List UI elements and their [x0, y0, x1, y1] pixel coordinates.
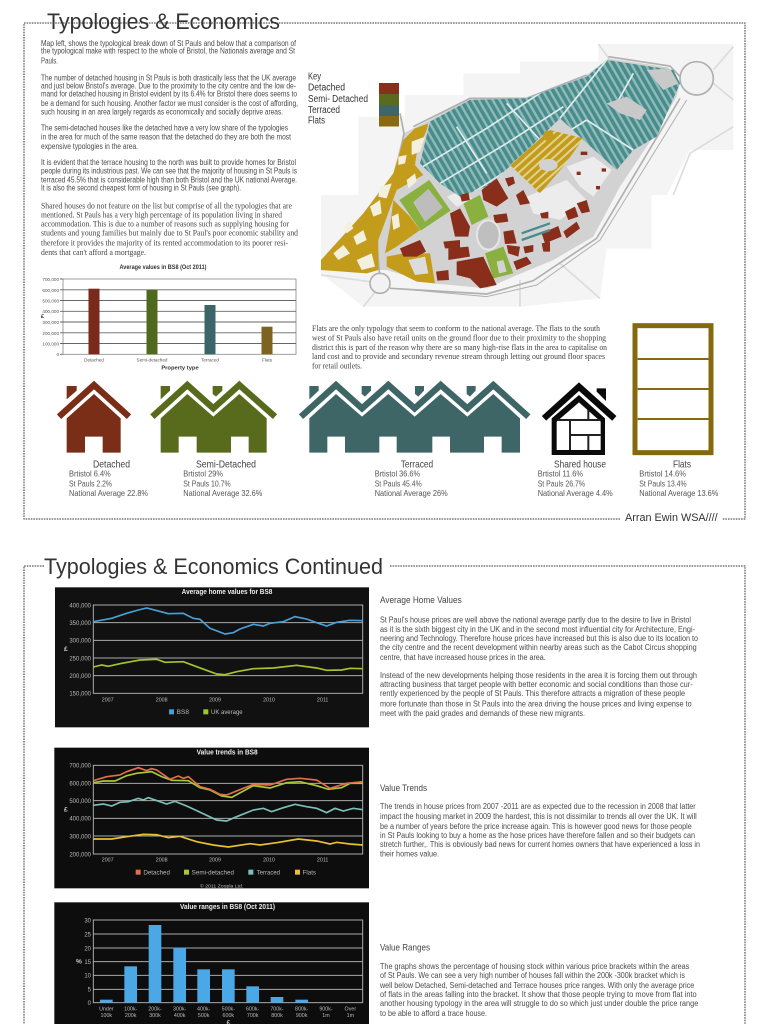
icon: semi-detached houses: [152, 385, 275, 453]
stats: shared house: Shared house: [554, 458, 606, 470]
bar chart: value ranges: 600k: [223, 1013, 234, 1019]
title: Typologies & Economics: [47, 9, 280, 34]
text block: value ranges: well below Detached, Semi-detached and Terrace houses price ranges. With only the average price: [379, 981, 694, 990]
bar chart: value ranges: 400k-: [197, 1007, 211, 1013]
line chart: average home values: 2011: [317, 698, 328, 704]
bar chart: average values: £: [41, 314, 44, 320]
line chart: value trends: 2010: [263, 857, 275, 863]
author credit: Arran Ewin WSA////: [625, 512, 719, 524]
stats: flats: St Pauls 13.4%: [639, 480, 687, 488]
bar chart: value ranges: 1m: [322, 1013, 330, 1019]
bar chart: value ranges: 300k: [149, 1013, 161, 1019]
bar chart: value ranges: 700k-: [270, 1007, 284, 1013]
bar chart: value ranges: Value ranges in BS8 (Oct 2011): [180, 902, 275, 911]
line chart: average home values: BS8: [177, 709, 189, 716]
map key: Terraced: [308, 105, 340, 116]
bar chart: average values: Average values in BS8 (Oct 2011): [120, 265, 206, 271]
text block: value trends: in St Pauls looking to buy a home as the hose prices have therefore fallen and so their budgets can: [380, 831, 695, 840]
bar chart: average values: 700,000: [42, 277, 59, 282]
map key: Key: [308, 72, 321, 82]
text block: value trends: impact the housing market in 2009 the hardest, this is not dissimilar to trends all over the UK. It will: [380, 812, 697, 821]
bar chart: value ranges: 30: [84, 918, 92, 924]
bar chart: value ranges: Over: [345, 1007, 356, 1013]
flats text block: Flats are the only typology that seem to conform to the national average. The flats to the south: [312, 323, 601, 333]
line chart: value trends: Semi-detached: [192, 869, 234, 876]
bar chart: value ranges: 10: [84, 974, 92, 980]
text block: average home values: attracting business that target people with better economic and social conditions than those cur-: [380, 680, 693, 689]
line chart: value trends: 400,000: [69, 817, 92, 823]
flats text block: district this is part of the reason why there are so many high-rise flats in the area to capitalise on: [312, 342, 608, 352]
flats text block: land cost and to provide and secondary revenue stream through letting out ground floor spaces: [312, 351, 606, 361]
detached housing: [400, 152, 606, 288]
line chart: value trends: Flats: [303, 869, 317, 876]
bar chart: average values: 400,000: [42, 309, 59, 314]
line chart: average home values: 200,000: [69, 674, 92, 680]
text block: value ranges: [379, 942, 698, 1018]
bar chart: value ranges: 800k: [271, 1013, 283, 1019]
bar chart: value ranges: 15: [84, 960, 92, 966]
stats: semi-detached: [183, 458, 262, 498]
stats: semi-detached: Semi-Detached: [196, 458, 256, 470]
stats: detached: Detached: [93, 458, 130, 470]
bar chart: average values: 300,000: [42, 320, 59, 325]
bar chart: average values: 600,000: [42, 288, 59, 293]
line chart: value trends: [54, 748, 369, 889]
shared houses text block: accommodation. This is due to a number of reasons such as supplying housing for: [41, 218, 289, 228]
line chart: average home values: £: [64, 646, 68, 653]
stats: flats: Flats: [673, 458, 691, 470]
title: Typologies & Economics Continued: [44, 554, 383, 579]
bar chart: value ranges: 300k-: [173, 1007, 187, 1013]
text block: average home values: St Paul's house prices are well above the national average partly due to the desire to live in Bristol: [380, 616, 691, 624]
bar chart: average values: [41, 265, 296, 372]
bar chart: average values: 500,000: [42, 298, 59, 304]
text block: value trends: [380, 783, 700, 858]
shared houses text block: students and young families but mainly due to St Paul's poor economic stability and: [41, 228, 299, 238]
line chart: average home values: 2009: [209, 698, 221, 704]
bar chart: value ranges: 1m: [347, 1013, 355, 1019]
stats: detached: [69, 458, 148, 498]
icon: terraced houses: [301, 385, 528, 453]
line chart: average home values: [55, 587, 369, 727]
bar chart: value ranges: 900k-: [319, 1007, 333, 1013]
bar chart: value ranges: 500k-: [222, 1007, 235, 1013]
line chart: value trends: 500,000: [69, 799, 92, 805]
intro text block: The semi-detached houses like the detached have a very low share of the typologies: [41, 124, 288, 132]
flats text block: for retail outlets.: [312, 360, 362, 370]
stats: detached: St Pauls 2.2%: [69, 480, 112, 488]
icon: detached house: [59, 385, 129, 453]
intro text block: the typological make with respect to the whole of Bristol, the Nationals average and St: [41, 46, 296, 56]
line chart: average home values: 350,000: [69, 621, 92, 627]
text block: average home values: rently experienced by the people of St Pauls. This therefore attracts a migration of these people: [380, 689, 685, 698]
intro text block: and just below Bristol's average. Due to the proximity to the city centre and the low de-: [41, 82, 296, 90]
map: typology breakdown of St Pauls: [321, 44, 733, 307]
line chart: average home values: 150,000: [69, 692, 92, 698]
line chart: average home values: 2010: [263, 698, 275, 704]
line chart: average home values: 400,000: [69, 603, 92, 609]
text block: value trends: Value Trends: [380, 783, 427, 793]
bar chart: value ranges: 500k: [198, 1013, 210, 1019]
stats: flats: Brtistol 14.6%: [639, 470, 686, 478]
text block: value trends: stretch further,. This is obviously bad news for current homes owners that have experienced a loss in: [380, 840, 700, 849]
line chart: average home values: 300,000: [69, 639, 92, 645]
panel: typologies and economics continued page: [24, 554, 745, 1024]
intro text block: expensive typologies in the area.: [41, 142, 138, 151]
stats: semi-detached: Brtistol 29%: [183, 470, 223, 478]
stats: detached: Brtistol 6.4%: [69, 470, 111, 478]
site base: [321, 58, 680, 288]
bar chart: value ranges: 800k-: [295, 1007, 309, 1013]
shared houses text block: dents that can't afford a mortgage.: [41, 247, 146, 257]
bar chart: average values: 100,000: [42, 342, 59, 346]
line chart: value trends: 200,000: [69, 852, 92, 858]
flats text block: west of St Pauls also have retail units on the ground floor due to their proximity to the shopping: [312, 332, 607, 342]
terraced strip: [522, 223, 550, 240]
bar chart: value ranges: 400k: [174, 1013, 186, 1019]
stats: flats: National Average 13.6%: [639, 489, 718, 498]
bar chart: average values: 200,000: [42, 331, 59, 336]
roads: [370, 57, 713, 297]
shared houses text block: Shared houses do not feature on the list but comprise of all the typologies that are: [41, 200, 292, 210]
bar chart: value ranges: 200k: [125, 1013, 137, 1019]
text block: average home values: Average Home Values: [380, 595, 462, 605]
bar chart: value ranges: 700k: [247, 1013, 259, 1019]
bar chart: average values: 0: [56, 352, 59, 357]
line chart: average home values: 250,000: [69, 656, 92, 662]
line chart: value trends: Detached: [143, 869, 170, 876]
line chart: average home values: Average home values for BS8: [182, 587, 272, 596]
stats: semi-detached: St Pauls 10.7%: [183, 480, 231, 488]
map key: Flats: [308, 116, 325, 126]
line chart: value trends: © 2011 Zoopla Ltd.: [200, 882, 243, 889]
text block: average home values: more fortunate than those in St Pauls into the area driving the house prices and living expense to: [380, 700, 692, 708]
terraced housing: [420, 60, 680, 196]
text block: average home values: neering and Technology. Therefore house prices have increased but this is also due to its location to: [380, 634, 699, 643]
intro text block: It is also the second cheapest form of housing in St Pauls (see graph).: [41, 184, 241, 192]
shared houses text block: [41, 200, 299, 257]
bar chart: value ranges: 5: [88, 988, 92, 994]
stats: shared house: [538, 458, 613, 498]
bar chart: value ranges: 0: [88, 1001, 92, 1007]
bar chart: value ranges: 600k-: [246, 1007, 260, 1013]
map key: Detached: [308, 82, 345, 94]
text block: average home values: the city centre and the recent development within nearby areas such as the Cabot Circus shopping: [380, 643, 697, 652]
bar chart: value ranges: 20: [84, 946, 92, 952]
text block: average home values: [380, 595, 699, 718]
line chart: value trends: 700,000: [69, 764, 92, 770]
flats housing: [321, 123, 435, 283]
stats: flats: [639, 458, 718, 498]
bar chart: value ranges: 25: [84, 932, 92, 938]
shared houses text block: therefore it provides the majority of its rented accommodation to its poorer resi-: [41, 238, 288, 248]
intro text block: It is evident that the terrace housing to the north was built to provide homes for Bristol: [41, 158, 296, 167]
intro text block: people during its industrious past. We can see that the majority of housing in St Pauls is: [41, 166, 297, 176]
stats: terraced: [375, 458, 448, 498]
line chart: value trends: 2008: [156, 857, 168, 863]
map key: [308, 72, 399, 126]
stats: terraced: Terraced: [401, 458, 433, 470]
bar chart: value ranges: 100k-: [124, 1007, 138, 1013]
bar chart: value ranges: %: [76, 959, 82, 966]
text block: value trends: The trends in house prices from 2007 -2011 are as expected due to the recession in 2008 that latter: [380, 802, 696, 811]
line chart: value trends: Terraced: [257, 869, 280, 876]
stats: terraced: St Pauls 45.4%: [375, 480, 422, 488]
bar chart: value ranges: 100k: [101, 1013, 112, 1019]
stats: terraced: Brtistol 36.6%: [375, 470, 420, 478]
bar chart: average values: Terraced: [201, 358, 219, 362]
stats: detached: National Average 22.8%: [69, 489, 148, 498]
intro text block: Pauls.: [41, 56, 58, 66]
icon: shared house: [544, 387, 614, 455]
intro text block: The number of detached housing in St Pauls is both drastically less that the UK average: [41, 74, 296, 82]
line chart: value trends: 2009: [209, 857, 221, 863]
text block: value ranges: to be able to afford a trace house.: [380, 1009, 487, 1018]
text block: value trends: their homes value.: [380, 850, 439, 858]
bar chart: value ranges: 900k: [296, 1013, 308, 1019]
intro text block: terraced 45.5% that is considerable high than both Bristol and the UK national Average.: [41, 176, 297, 184]
line chart: average home values: 2008: [156, 698, 168, 704]
intro text block: mand for detached housing in Bristol evident by its 6.4% for Bristol there does seems to: [41, 90, 298, 98]
text block: value trends: be a number of years before the price increase again. This is however good news for those people: [380, 822, 692, 831]
shared houses text block: mentioned. St Pauls has a very high percentage of its population living in shared: [41, 210, 283, 220]
stats: semi-detached: National Average 32.6%: [183, 489, 262, 498]
stats: shared house: Brtistol 11.6%: [538, 470, 583, 478]
central flats: [510, 130, 583, 193]
line chart: value trends: £: [64, 807, 68, 814]
stats: shared house: National Average 4.4%: [538, 489, 613, 498]
stats: shared house: St Pauls 26.7%: [538, 480, 585, 488]
intro text block: [41, 39, 298, 192]
text block: value ranges: Value Ranges: [380, 942, 430, 952]
text block: value ranges: The graphs shows the percentage of housing stock within various price brackets within the areas: [380, 962, 689, 971]
text block: average home values: as it is the sixth biggest city in the UK and in the second most influential city for Architecture, Engi-: [380, 625, 695, 634]
bar chart: value ranges: 200k-: [148, 1007, 162, 1013]
line chart: value trends: Value trends in BS8: [197, 748, 258, 757]
flats text block: [312, 323, 608, 370]
intro text block: in the area for much of the same reason that the detached do they are both the most: [41, 132, 292, 142]
panel: typologies and economics page: [24, 9, 745, 524]
bar chart: value ranges: [54, 902, 369, 1024]
map key: Semi- Detached: [308, 94, 368, 105]
line chart: value trends: 300,000: [69, 834, 92, 840]
icon: flats: [635, 326, 711, 453]
line chart: value trends: 2007: [102, 857, 114, 863]
line chart: value trends: 600,000: [69, 782, 92, 788]
semi-detached housing: [399, 180, 513, 278]
bar chart: average values: Property type: [161, 366, 199, 372]
text block: value ranges: of flats in the areas falling into the bracket. It show that those people trying to move from flat into: [380, 990, 697, 999]
intro text block: be a demand for such housing. Another factor we must consider is the cost of affording,: [41, 99, 298, 108]
bar chart: average values: Flats: [262, 358, 273, 362]
intro text block: such housing in an area largely regards as economically and socially deprive areas.: [41, 108, 283, 116]
bar chart: average values: Detached: [84, 358, 104, 362]
text block: average home values: meet with the paid grades and demands of these new migrants.: [380, 709, 585, 718]
intro text block: Map left, shows the typological break down of St Pauls and below that a comparison of: [41, 39, 297, 48]
line chart: value trends: 2011: [317, 857, 328, 863]
stats: terraced: National Average 26%: [375, 489, 448, 498]
bar chart: average values: Semi-detached: [137, 358, 168, 362]
bar chart: value ranges: Under: [99, 1007, 114, 1013]
line chart: average home values: UK average: [211, 709, 243, 716]
text block: value ranges: of St Pauls. We can see a very high number of houses fall within the 200k -300k bracket which is: [380, 971, 685, 980]
text block: average home values: centre, that have increased house prices in the area.: [380, 653, 546, 662]
line chart: average home values: 2007: [102, 698, 114, 704]
text block: value ranges: another housing typology in the area will struggle to do so which just under double the price range: [380, 999, 698, 1008]
text block: average home values: Instead of the new developments helping those residents in the area it is forcing them out through: [380, 671, 697, 680]
